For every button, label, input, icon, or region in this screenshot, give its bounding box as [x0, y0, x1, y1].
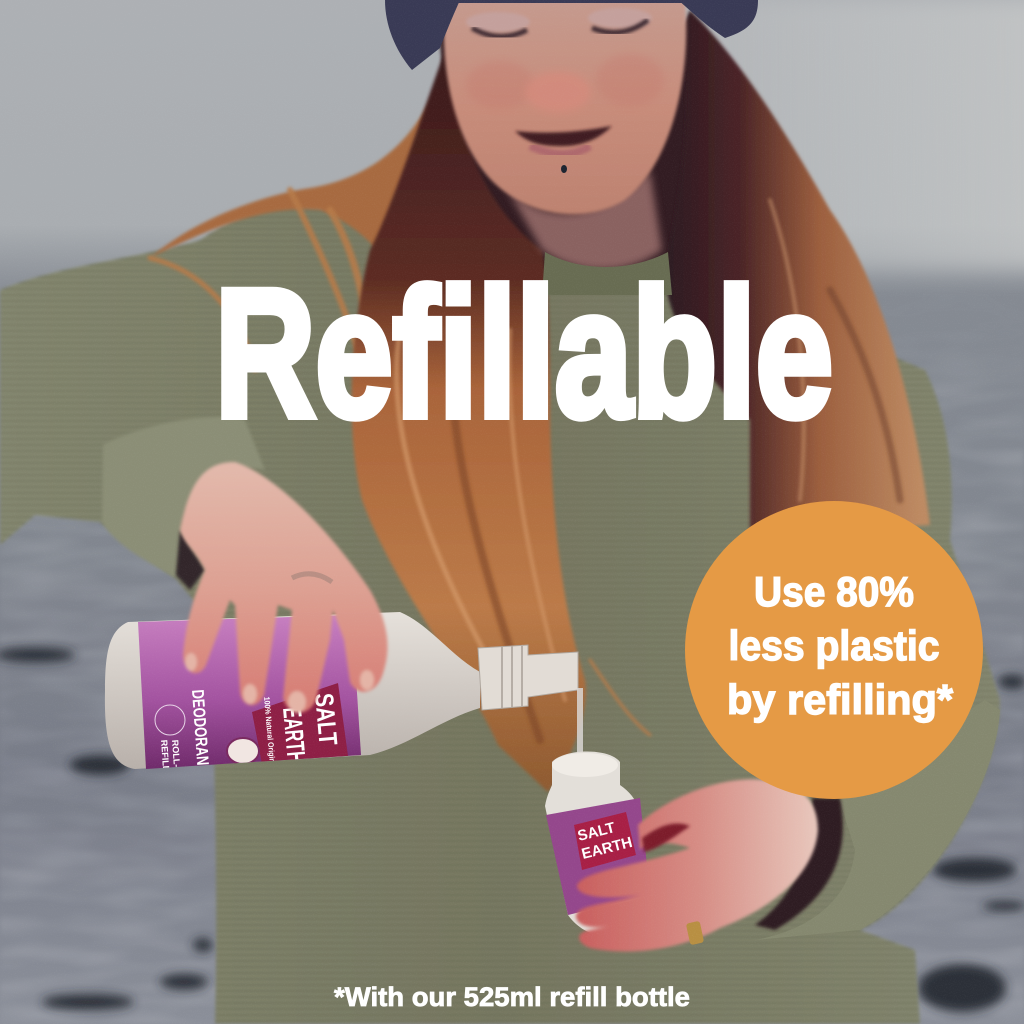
callout text — [727, 568, 954, 723]
brand block — [252, 683, 348, 764]
refill bottle — [105, 612, 583, 781]
dark hair behind face — [438, 30, 725, 280]
wedding ring — [686, 921, 704, 945]
redness between fingers — [642, 823, 690, 852]
refill text: ROLL-ON — [170, 739, 183, 781]
callout text: Use 80% — [754, 568, 914, 615]
natural origin line: 100% Natural Origin — [262, 696, 277, 763]
neck — [505, 170, 662, 270]
left sleeve cuff — [102, 417, 265, 578]
roll-on brand block — [574, 812, 636, 870]
second refill text: REFILL — [159, 739, 171, 772]
t-shirt collar — [542, 252, 672, 295]
cap ridges — [502, 646, 522, 708]
small roll-on bottle — [545, 752, 650, 935]
brand text EARTH: EARTH — [277, 706, 312, 764]
callout text: less plastic — [728, 622, 940, 669]
bottle printed details — [154, 683, 348, 768]
ring on finger — [292, 574, 332, 582]
hair strand highlights — [397, 200, 900, 740]
beanie — [385, 0, 758, 70]
roll-on label — [546, 798, 650, 915]
roll-on opening — [552, 753, 618, 777]
footnote: *With our 525ml refill bottle — [334, 982, 690, 1012]
pour stream — [577, 688, 583, 754]
left hand with fingers — [180, 462, 387, 713]
badge — [227, 738, 259, 764]
orange callout badge — [685, 501, 983, 799]
fingernails — [185, 653, 374, 713]
roll-on brand text: SALT — [576, 819, 617, 845]
title: Refillable — [215, 251, 833, 455]
deodorant text: DEODORAN — [188, 689, 212, 766]
refill icon — [155, 705, 185, 735]
right hand holding roll-on — [576, 779, 818, 951]
face — [444, 0, 686, 214]
facial features — [466, 8, 664, 173]
dark gap behind hand — [176, 530, 205, 590]
wispy hair over left shoulder — [150, 190, 650, 735]
callout text: by refilling* — [727, 676, 954, 723]
right sleeve cuff — [755, 700, 1000, 940]
shoulder hair sweep — [150, 70, 445, 260]
bottle label — [138, 615, 361, 769]
bottle neck and cap — [478, 645, 578, 710]
shadow inside cuff — [755, 798, 843, 930]
roll-on brand text second line: EARTH — [580, 834, 634, 863]
brand text SALT: SALT — [309, 692, 343, 746]
long hair front right — [665, 10, 930, 535]
long hair front left — [352, 50, 586, 792]
sweater body and sleeves — [0, 205, 1000, 1024]
